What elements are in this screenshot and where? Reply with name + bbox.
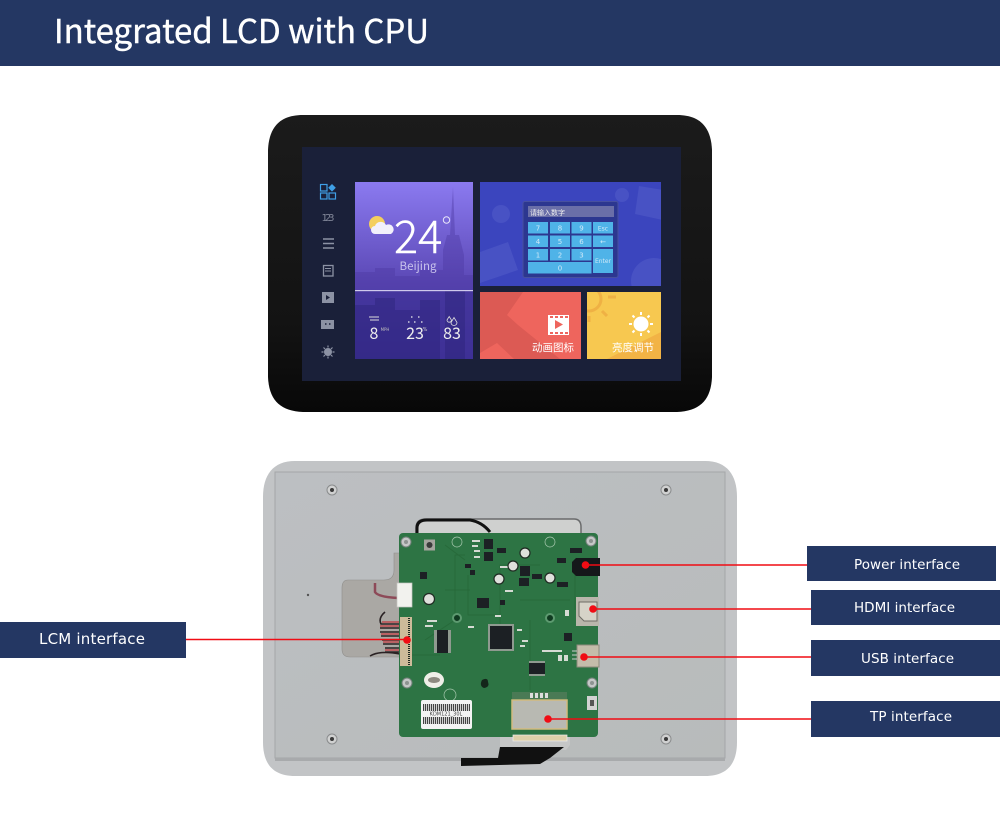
callout: LCM interface: [0, 622, 411, 658]
mounting rings: [444, 537, 555, 701]
ribbon opening: [500, 737, 570, 750]
keypad tile: Enter: [595, 258, 612, 265]
USB port: [572, 645, 599, 667]
TP connector: [512, 692, 567, 741]
LCD back view: [263, 461, 737, 776]
keypad tile: 5: [558, 238, 562, 246]
HDMI port: [576, 597, 599, 626]
keypad tile: 3: [579, 252, 584, 260]
sidebar icons: [320, 184, 336, 358]
animation icon tile: [480, 292, 581, 359]
weather tile: [355, 182, 473, 359]
brightness tile: [587, 292, 661, 359]
weather tile: 8: [370, 320, 379, 344]
PCB screws: [401, 536, 597, 688]
small dark mark: [481, 679, 488, 688]
keypad tile: Esc: [598, 226, 608, 232]
callout: USB interface: [580, 640, 1000, 676]
upper opening: [416, 519, 581, 535]
green PCB: [397, 533, 600, 741]
black ribbon cable: [461, 747, 564, 766]
barcode label: [421, 700, 472, 729]
keypad tile: 1: [536, 252, 540, 260]
LCD front view: [268, 115, 712, 412]
keypad tile: 9: [579, 224, 584, 232]
capacitors: [424, 548, 555, 604]
keypad tile: 0: [558, 264, 562, 272]
weather tile: 83: [443, 320, 461, 344]
animation icon tile: 动画图标: [532, 340, 574, 355]
callout: Power interface: Power interface: [854, 557, 960, 573]
bezel: [268, 115, 712, 412]
keypad tile: ←: [600, 238, 606, 246]
weather tile: %: [423, 327, 428, 333]
round sticker: [424, 672, 444, 688]
title: Integrated LCD with CPU: [54, 5, 429, 53]
chips: [434, 624, 545, 676]
screen: [302, 147, 681, 381]
callout: LCM interface: LCM interface: [39, 630, 145, 648]
button: [424, 540, 435, 550]
keypad tile: 7: [536, 224, 540, 232]
weather tile: 23: [406, 320, 424, 344]
keypad tile: 8: [558, 224, 562, 232]
callout: USB interface: USB interface: [861, 651, 954, 667]
SMD parts: [470, 548, 582, 587]
screw holes: [327, 485, 671, 744]
sidebar icons: 123: [322, 213, 334, 224]
LCM connector: [400, 617, 412, 666]
callout: Power interface: [582, 546, 996, 581]
keypad tile: 2: [558, 252, 562, 260]
cutout: [342, 553, 420, 657]
callout: HDMI interface: [589, 590, 1000, 625]
weather tile: MPH: [381, 327, 389, 332]
micro USB: [587, 696, 597, 710]
keypad tile: 6: [579, 238, 584, 246]
keypad tile: 请输入数字: [530, 208, 565, 218]
cable bundle: [370, 612, 404, 656]
weather tile: 24: [394, 201, 442, 266]
callout: TP interface: TP interface: [869, 709, 952, 725]
white connector: [397, 583, 412, 607]
weather tile: Beijing: [400, 258, 437, 274]
header banner: [0, 0, 1000, 66]
power jack: [572, 558, 600, 576]
callout: HDMI interface: HDMI interface: [854, 600, 955, 616]
keypad tile: 4: [536, 238, 541, 246]
brightness tile: 亮度调节: [612, 340, 654, 355]
metal back plate: [263, 461, 737, 776]
barcode label: KDM121_30L: [430, 712, 463, 718]
callout: TP interface: [544, 701, 1000, 737]
keypad tile: [480, 182, 661, 286]
